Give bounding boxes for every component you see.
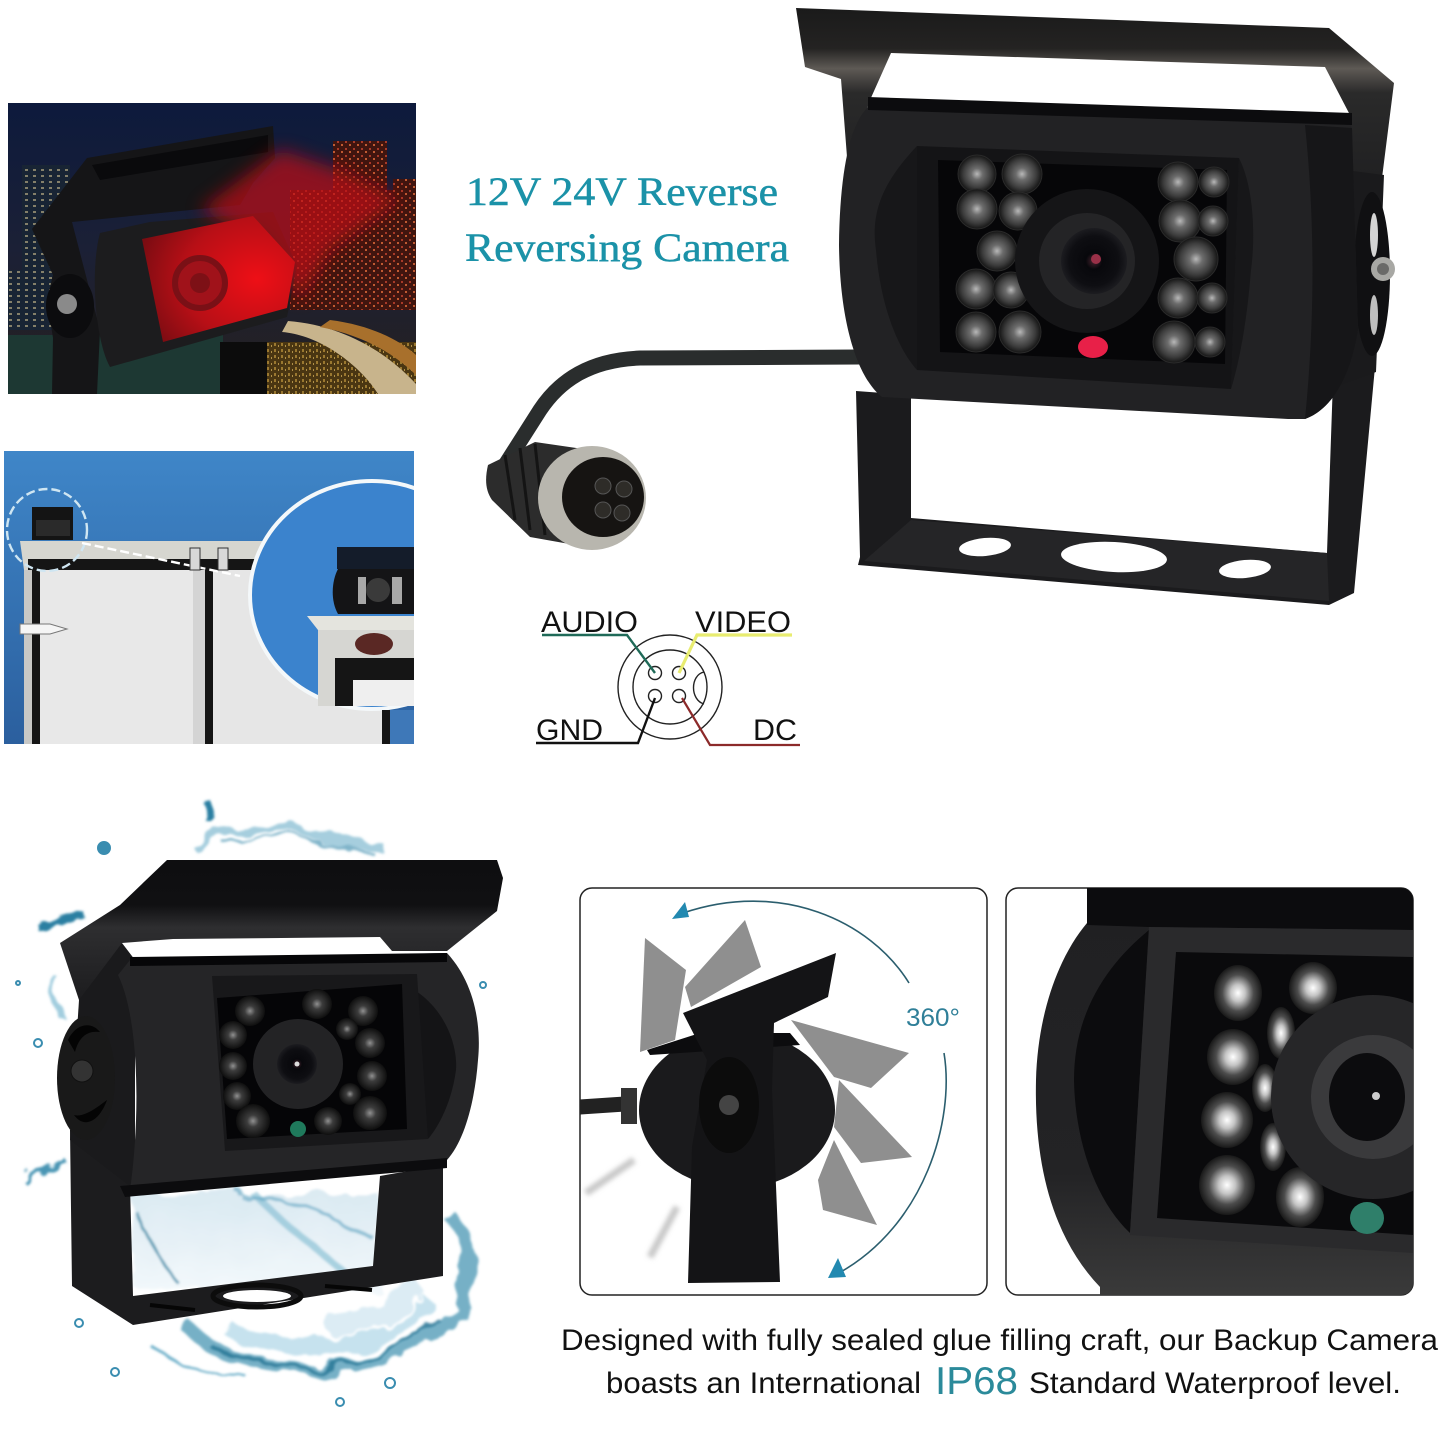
ghost rotation positions bbox=[640, 920, 912, 1225]
green sensor bbox=[290, 1121, 306, 1137]
left arm bbox=[70, 943, 135, 1190]
U bracket bbox=[70, 1120, 443, 1325]
lens bbox=[1271, 995, 1413, 1199]
face frame bbox=[212, 974, 428, 1151]
lens bbox=[1015, 189, 1159, 333]
pinout diagram: GND bbox=[536, 714, 603, 747]
red indicator bbox=[1078, 336, 1108, 358]
360 label: 360° bbox=[906, 1004, 960, 1032]
panel: LED close-up bbox=[1006, 888, 1445, 1295]
faded spokes bbox=[586, 1160, 677, 1257]
caption bbox=[561, 1324, 1438, 1403]
face recess bbox=[917, 146, 1239, 389]
title bbox=[465, 169, 789, 270]
bolt plate bbox=[1354, 192, 1395, 356]
caption: Designed with fully sealed glue filling craft, our Backup Camera bbox=[561, 1324, 1438, 1357]
truck roof bbox=[20, 541, 262, 570]
pinout diagram bbox=[536, 606, 800, 747]
lens bbox=[253, 1019, 343, 1109]
photo: camera mounted on truck bbox=[4, 451, 414, 744]
LEDs bbox=[1199, 962, 1337, 1227]
LEDs bbox=[219, 989, 387, 1138]
title: Reversing Camera bbox=[465, 225, 789, 270]
body bbox=[839, 99, 1358, 419]
hood bbox=[60, 860, 503, 1010]
zoom circle bbox=[248, 479, 414, 711]
green sensor bbox=[1350, 1202, 1384, 1234]
cable bbox=[505, 357, 860, 465]
waterproof camera with water splash bbox=[16, 800, 503, 1406]
highlighted IP68: IP68 bbox=[935, 1360, 1018, 1403]
right side panel bbox=[403, 984, 456, 1139]
crescent bbox=[1074, 930, 1149, 1233]
hood bbox=[796, 8, 1394, 210]
pinout diagram: VIDEO bbox=[695, 606, 791, 639]
main camera with cable bbox=[486, 8, 1395, 605]
caption: boasts an International bbox=[606, 1367, 921, 1400]
U bracket bbox=[856, 356, 1376, 605]
cable bbox=[580, 1104, 625, 1107]
side panels bbox=[875, 146, 917, 370]
body bbox=[118, 953, 479, 1190]
right arm backing bbox=[1340, 170, 1384, 385]
LEDs bbox=[956, 154, 1229, 363]
camera rear bbox=[639, 1032, 835, 1188]
rotation arc bbox=[683, 901, 946, 1273]
water splash bbox=[20, 800, 469, 1380]
pinout diagram: AUDIO bbox=[541, 606, 638, 639]
photo: camera at night with red glow bbox=[8, 103, 416, 394]
frame bbox=[1130, 927, 1413, 1253]
caption: Standard Waterproof level. bbox=[1029, 1367, 1401, 1400]
panel: 360 degree rotation bbox=[580, 888, 987, 1295]
bolt plate bbox=[57, 1016, 115, 1140]
title: 12V 24V Reverse bbox=[466, 169, 778, 214]
pinout diagram: DC bbox=[753, 714, 797, 747]
connector plug bbox=[486, 442, 646, 550]
